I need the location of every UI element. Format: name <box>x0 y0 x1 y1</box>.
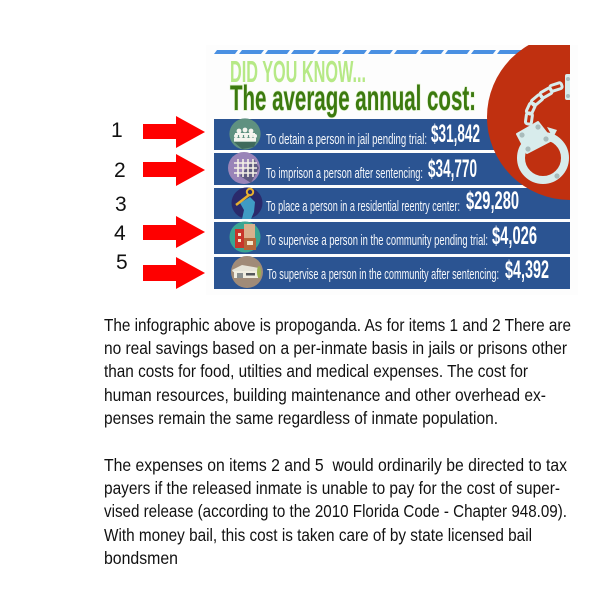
arrow 4 <box>143 216 205 248</box>
number labels: 5 <box>116 251 128 274</box>
icon: prison bars <box>228 152 260 184</box>
paragraph 1: than costs for food, utilties and medical expenses. The cost for <box>104 361 528 381</box>
number labels: 1 <box>111 119 123 142</box>
row 4: supervise pending trial: $4,026 <box>492 222 537 250</box>
row 3: reentry center: $29,280 <box>466 187 519 215</box>
paragraph 2 <box>104 455 567 568</box>
icon: house <box>231 256 263 288</box>
number labels: 3 <box>115 193 127 216</box>
number labels: 2 <box>114 159 126 182</box>
paragraph 2: With money bail, this cost is taken care of by state licensed bail <box>104 525 532 545</box>
paragraph 1: human resources, building maintenance and other overhead ex- <box>104 385 546 405</box>
infographic panel <box>214 45 570 289</box>
row 5: supervise after sentencing <box>231 256 549 288</box>
number labels: 4 <box>114 222 126 245</box>
icon: buildings <box>230 222 260 252</box>
row 4: supervise pending trial <box>230 222 537 252</box>
cost bars <box>214 119 570 289</box>
paragraph 1 <box>104 315 571 428</box>
row 5: supervise after sentencing: $4,392 <box>505 256 549 284</box>
heading: did you know: DID YOU KNOW... <box>230 54 366 89</box>
paragraph 1: penses remain the same regardless of inmate population. <box>104 408 498 428</box>
row 1: jail pending trial: To detain a person in jail pending trial: <box>266 131 427 148</box>
arrow 2 <box>143 154 205 186</box>
arrow 1 <box>143 116 205 148</box>
row 2: imprison <box>228 152 477 184</box>
row 3: reentry center: To place a person in a residential reentry center: <box>266 198 460 215</box>
icon: handcuffs on red circle <box>487 45 570 200</box>
dashed stripe header <box>214 50 522 54</box>
icon: hand with key <box>232 188 262 219</box>
paragraph 2: bondsmen <box>104 548 178 568</box>
arrow 5 <box>143 257 205 289</box>
row 3: reentry center <box>232 187 519 219</box>
number labels <box>111 119 128 274</box>
row 1: jail pending trial: $31,842 <box>431 120 480 148</box>
icon: people group <box>229 118 261 150</box>
row 2: imprison: To imprison a person after sentencing: <box>266 165 423 182</box>
row 2: imprison: $34,770 <box>428 155 477 183</box>
row 1: jail pending trial <box>229 118 480 150</box>
